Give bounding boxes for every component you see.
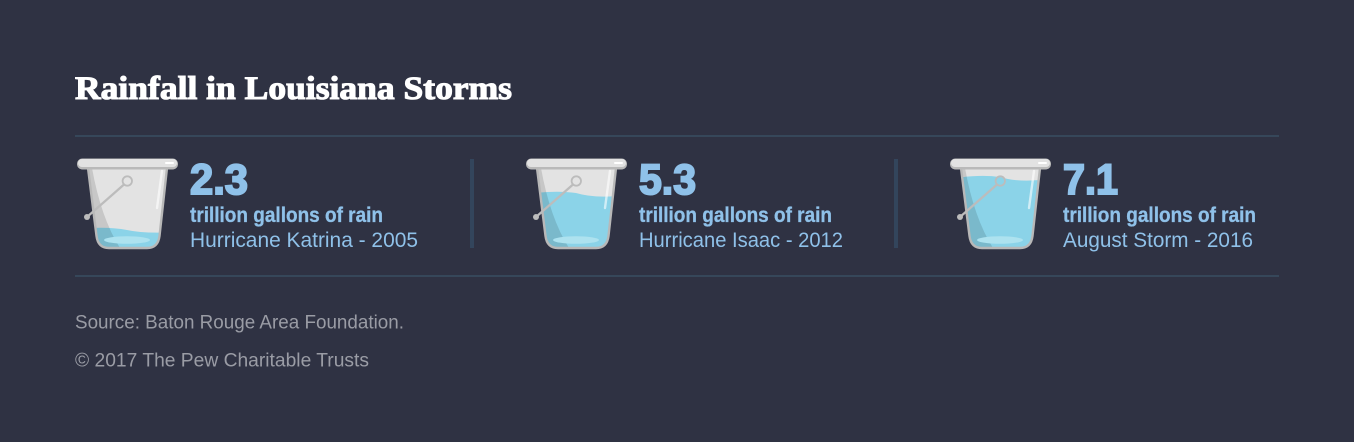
label: trillion gallons of rain bbox=[1063, 204, 1256, 227]
label: trillion gallons of rain bbox=[190, 204, 383, 227]
storm name: August Storm - 2016 bbox=[1063, 229, 1253, 252]
icon: bucket half full bbox=[526, 158, 627, 253]
icon: bucket nearly full bbox=[950, 158, 1051, 253]
label: trillion gallons of rain bbox=[639, 204, 832, 227]
source note: Source: Baton Rouge Area Foundation. bbox=[75, 312, 404, 334]
storm name: Hurricane Katrina - 2005 bbox=[190, 229, 418, 252]
copyright note: © 2017 The Pew Charitable Trusts bbox=[75, 350, 369, 372]
title: Rainfall in Louisiana Storms bbox=[75, 71, 512, 107]
figure: 7.1 bbox=[1063, 156, 1118, 204]
panel: Hurricane Isaac bbox=[526, 156, 843, 253]
icon: bucket with low water bbox=[77, 158, 178, 253]
storm name: Hurricane Isaac - 2012 bbox=[639, 229, 843, 252]
figure: 2.3 bbox=[190, 156, 248, 204]
panel: August Storm bbox=[950, 156, 1256, 253]
panel: Hurricane Katrina bbox=[77, 156, 418, 253]
figure: 5.3 bbox=[639, 156, 696, 204]
